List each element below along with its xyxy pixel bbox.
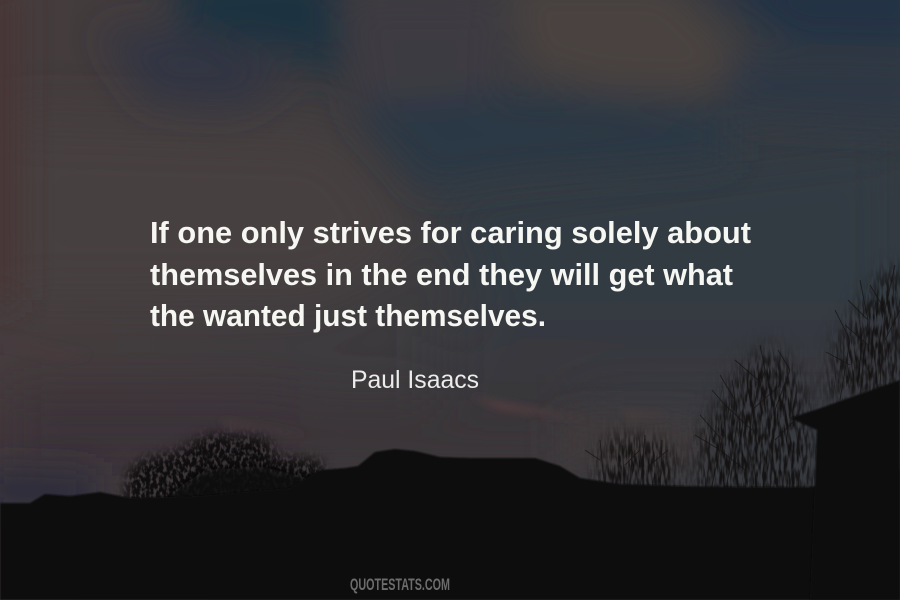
- quote line 3: the wanted just themselves.: [150, 298, 546, 333]
- quote text: [150, 215, 751, 333]
- trees and house silhouette: [0, 265, 900, 600]
- tree canopy solid core: [160, 466, 340, 510]
- left tree canopy: [122, 434, 328, 510]
- watermark: QUOTESTATS.COM: [350, 575, 450, 594]
- quote line 2: themselves in the end they will get what: [150, 257, 733, 292]
- ground and treeline: [0, 449, 900, 600]
- quote line 1: If one only strives for caring solely about: [150, 215, 751, 250]
- bare trees right: [596, 268, 900, 510]
- house: [790, 380, 900, 600]
- author name: Paul Isaacs: [351, 366, 479, 394]
- bare branches: [585, 265, 900, 495]
